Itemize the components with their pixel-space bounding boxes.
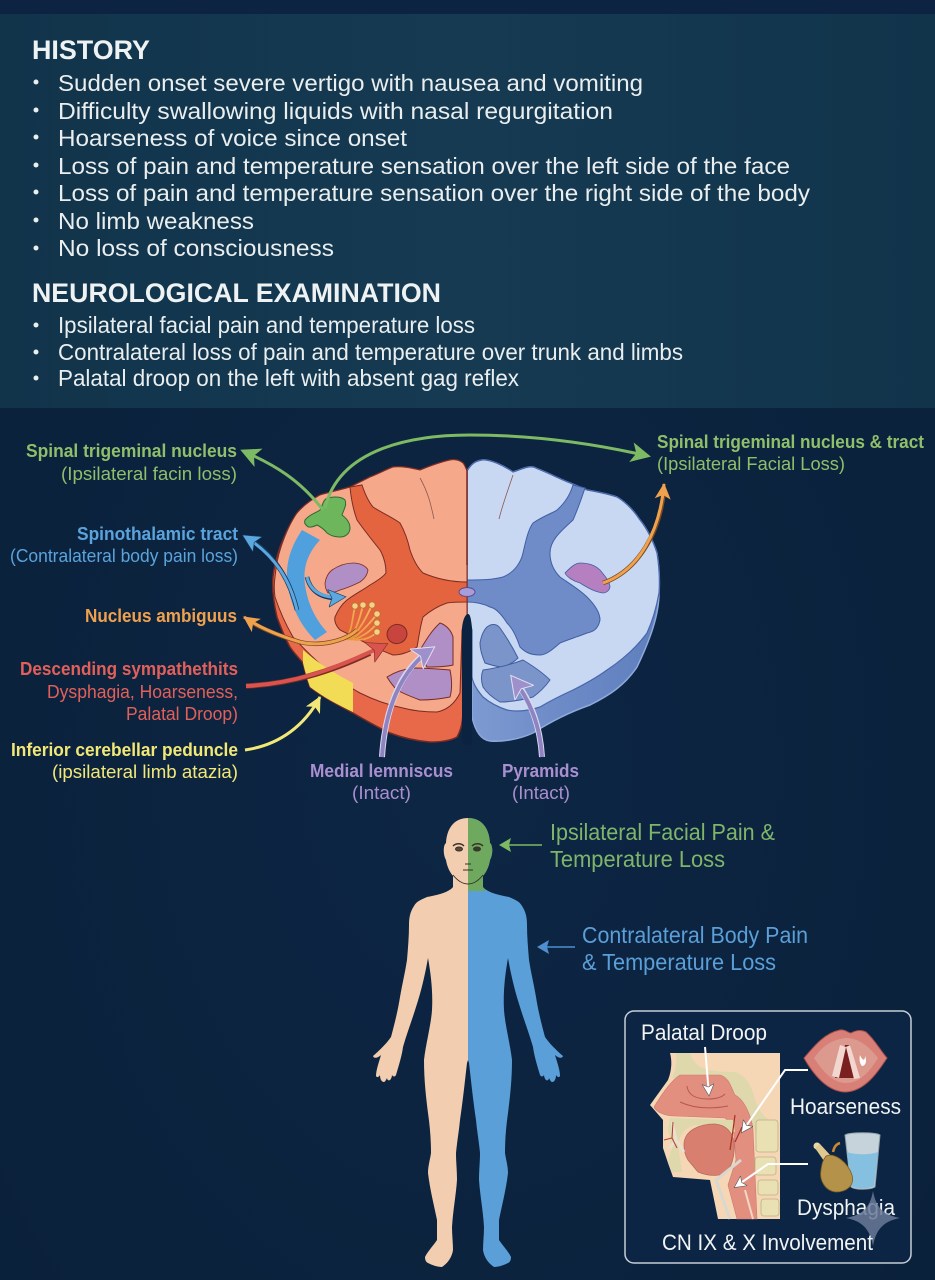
- label: spinal trigeminal nucleus and tract: Spinal trigeminal nucleus & tract: [657, 432, 924, 452]
- left half base: [273, 460, 467, 742]
- label: inferior cerebellar peduncle: (ipsilateral limb atazia): [52, 762, 238, 782]
- arrow: right tract to label: [603, 484, 664, 583]
- inferior cerebellar peduncle region: [303, 650, 353, 712]
- list: history findings: Loss of pain and temperature sensation over the left side of the face: [58, 153, 790, 179]
- spinothalamic tract band: [287, 530, 327, 640]
- right medial lemniscus and pyramid: [480, 624, 550, 702]
- label: spinothalamic tract: (Contralateral body pain loss): [10, 546, 238, 566]
- icon: sparkle: [846, 1191, 900, 1246]
- arrow: trigeminal nucleus to left label: [243, 451, 323, 510]
- right sensory tract purple: [565, 563, 610, 593]
- label: pyramids: Pyramids: [502, 761, 579, 781]
- label: spinal trigeminal nucleus: [26, 441, 237, 484]
- list: examination findings: [34, 312, 683, 391]
- label: descending sympathetic: Palatal Droop): [126, 704, 238, 724]
- label: medial lemniscus: [310, 761, 453, 803]
- arrow: medial lemniscus: [382, 648, 433, 757]
- right half of body: [468, 818, 563, 1267]
- left sensory tract purple: [325, 563, 368, 593]
- label: nucleus ambiguus: Nucleus ambiguus: [85, 606, 237, 626]
- label: spinal trigeminal nucleus: (Ipsilateral facin loss): [61, 464, 237, 484]
- arrow: inferior cerebellar peduncle: [245, 697, 320, 750]
- spinal trigeminal nucleus blob: [305, 497, 350, 537]
- arrow: to body loss label: [537, 940, 575, 954]
- nucleus ambiguus fan: [345, 602, 380, 640]
- list: examination findings: Contralateral loss of pain and temperature over trunk and limbs: [58, 339, 683, 365]
- label: pyramids: (Intact): [512, 783, 570, 803]
- arrow: palatal droop pointer: [705, 1047, 709, 1095]
- list: history findings: No loss of consciousness: [58, 235, 334, 261]
- left white matter: [274, 460, 467, 712]
- label: contralateral body loss: [582, 922, 808, 975]
- label: dysphagia: Dysphagia: [797, 1195, 896, 1220]
- face features: [453, 844, 483, 884]
- green half of head: [468, 818, 492, 891]
- illustration: sagittal head and throat: [650, 1053, 780, 1219]
- label: CN IX and X involvement: CN IX & X Involvement: [662, 1230, 873, 1255]
- label: descending sympathetic: Descending sympathethits: [20, 659, 238, 679]
- list: history findings: Hoarseness of voice since onset: [58, 125, 408, 151]
- label: descending sympathetic: Dysphagia, Hoarseness,: [47, 682, 238, 702]
- label: ipsilateral facial loss: Ipsilateral Facial Pain &: [550, 819, 775, 845]
- descending sympathetic tract oval: [384, 622, 410, 646]
- panel: history and neurological examination: [0, 14, 935, 408]
- right grey matter: [467, 485, 600, 655]
- label: ipsilateral facial loss: Temperature Loss: [550, 846, 725, 872]
- label: medial lemniscus: (Intact): [352, 783, 411, 803]
- arrow: hoarseness pointer: [742, 1070, 808, 1132]
- arrow: trigeminal nucleus to right label: [325, 435, 648, 508]
- arrow: spinothalamic inner: [307, 577, 344, 598]
- label: inferior cerebellar peduncle: Inferior cerebellar peduncle: [11, 740, 238, 760]
- label: spinal trigeminal nucleus: Spinal trigeminal nucleus: [26, 441, 237, 461]
- midline septum and ventral fissure: [466, 470, 468, 565]
- list: history findings: Loss of pain and temperature sensation over the right side of the body: [58, 180, 811, 206]
- chart: medulla cross-section: [273, 460, 659, 745]
- list: history findings: Difficulty swallowing liquids with nasal regurgitation: [58, 98, 613, 124]
- label: contralateral body loss: Contralateral Body Pain: [582, 922, 808, 948]
- panel: CN IX and X inset: [625, 1011, 911, 1263]
- arrow: spinothalamic tract to label: [244, 536, 297, 610]
- heading: neurological examination: NEUROLOGICAL EXAMINATION: [32, 278, 441, 308]
- left grey matter: [335, 485, 467, 655]
- arrow: to facial loss label: [499, 838, 542, 852]
- arrow: nucleus ambiguus to label: [244, 617, 357, 644]
- label: spinothalamic tract: Spinothalamic tract: [77, 524, 238, 544]
- label: inferior cerebellar peduncle: [11, 740, 238, 782]
- label: pyramids: [502, 761, 579, 803]
- list: examination findings: Ipsilateral facial pain and temperature loss: [58, 312, 475, 338]
- right half side wall: [467, 460, 659, 741]
- label: spinal trigeminal nucleus and tract: [657, 432, 924, 474]
- label: ipsilateral facial loss: [550, 819, 775, 872]
- label: palatal droop: Palatal Droop: [641, 1020, 767, 1045]
- arrow: pyramids: [512, 677, 542, 757]
- arrow: descending sympathetic: [246, 645, 385, 686]
- list: history findings: Sudden onset severe vertigo with nausea and vomiting: [58, 70, 643, 96]
- arrow: dysphagia pointer: [735, 1164, 808, 1187]
- label: spinothalamic tract: [10, 524, 238, 566]
- heading: history: HISTORY: [32, 35, 150, 65]
- list: history findings: No limb weakness: [58, 208, 254, 234]
- list: history findings: [34, 70, 811, 261]
- icon: mouth with vocal cords: [804, 1030, 887, 1092]
- label: contralateral body loss: & Temperature Loss: [582, 949, 776, 975]
- left half of body: [373, 818, 468, 1267]
- label: descending sympathetic: [20, 659, 238, 724]
- figure: human body: [373, 818, 563, 1267]
- icon: drumstick and water glass: [814, 1133, 880, 1192]
- label: hoarseness: Hoarseness: [790, 1094, 901, 1119]
- label: medial lemniscus: Medial lemniscus: [310, 761, 453, 781]
- right half white matter: [467, 460, 659, 711]
- left medial lemniscus and pyramid: [387, 623, 453, 700]
- central canal: [459, 588, 475, 596]
- label: spinal trigeminal nucleus and tract: (Ipsilateral Facial Loss): [657, 454, 845, 474]
- list: examination findings: Palatal droop on the left with absent gag reflex: [58, 365, 519, 391]
